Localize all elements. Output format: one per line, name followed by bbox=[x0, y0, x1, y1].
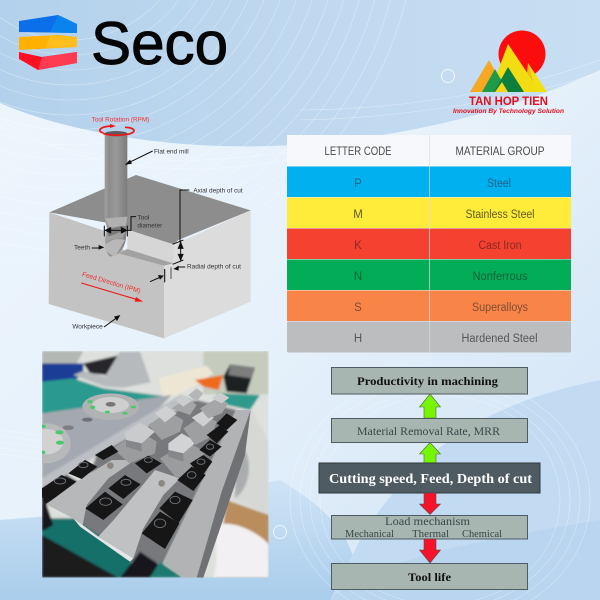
row M: stainless steel bbox=[287, 198, 571, 228]
steel bolts bbox=[107, 462, 165, 487]
row P: steel: P bbox=[354, 178, 362, 190]
aluminium rails bbox=[46, 410, 251, 578]
box: cutting parameters: Cutting speed, Feed, Depth of cut bbox=[329, 472, 532, 487]
label: workpiece bbox=[72, 315, 120, 330]
label: tool diameter bbox=[104, 214, 162, 236]
row H: hardened steel: Hardened Steel bbox=[462, 333, 538, 345]
box: load mechanism: Chemical bbox=[462, 529, 502, 540]
icon: Seco stacked bands bbox=[19, 15, 77, 70]
box: material removal rate bbox=[332, 418, 528, 442]
workpiece block bbox=[49, 175, 251, 338]
label: axial depth of cut: Axial depth of cut bbox=[193, 187, 243, 194]
row S: superalloys: S bbox=[354, 302, 362, 314]
logo: Seco bbox=[19, 10, 228, 77]
machined parts bbox=[113, 388, 229, 478]
row N: nonferrous: Nonferrous bbox=[472, 271, 528, 283]
row H: hardened steel: H bbox=[354, 333, 362, 345]
flat end mill bbox=[105, 131, 127, 257]
fixture discs bbox=[42, 393, 139, 464]
row M: stainless steel: M bbox=[353, 209, 363, 221]
row S: superalloys: Superalloys bbox=[472, 302, 528, 314]
label: flat end mill bbox=[125, 149, 189, 165]
row S: superalloys bbox=[287, 290, 571, 321]
box: load mechanism: Mechanical bbox=[345, 529, 394, 540]
feed direction arrow: Feed Direction (IPM) bbox=[81, 271, 141, 295]
label: radial depth of cut: Radial depth of cut bbox=[187, 264, 241, 271]
box: load mechanism: Thermal bbox=[412, 529, 449, 540]
box: productivity in machining: Productivity in machining bbox=[357, 374, 498, 388]
company name: TAN HOP TIEN bbox=[469, 96, 548, 108]
box: load mechanism bbox=[332, 514, 528, 540]
box: productivity in machining bbox=[332, 368, 528, 394]
row N: nonferrous: N bbox=[354, 271, 362, 283]
diagram: end milling bbox=[49, 116, 251, 338]
flow chart bbox=[319, 368, 540, 590]
box: material removal rate: Material Removal Rate, MRR bbox=[357, 424, 500, 438]
row P: steel: Steel bbox=[487, 178, 511, 190]
row N: nonferrous bbox=[287, 260, 571, 290]
icon: sun and mountains bbox=[470, 30, 547, 92]
tagline: Innovation By Technology Solution bbox=[453, 108, 564, 115]
label: radial depth of cut bbox=[150, 264, 241, 282]
arrow: red down 1 bbox=[420, 493, 440, 514]
table: ISO material groups bbox=[287, 135, 571, 352]
label: workpiece: Workpiece bbox=[72, 323, 103, 330]
wordmark: Seco bbox=[91, 10, 228, 77]
box: cutting parameters bbox=[319, 463, 540, 493]
label: teeth bbox=[74, 245, 104, 252]
arrow: red down 2 bbox=[420, 539, 440, 563]
label: axial depth of cut bbox=[173, 187, 243, 264]
arrow: green up 1 bbox=[420, 394, 440, 418]
box: tool life bbox=[332, 564, 528, 590]
label: tool diameter: diameter bbox=[137, 222, 162, 229]
logo: Tan Hop Tien bbox=[453, 30, 564, 115]
arrow: green up 2 bbox=[420, 442, 440, 463]
label: teeth: Teeth bbox=[74, 245, 90, 252]
rotation arrow bbox=[100, 124, 134, 135]
row K: cast iron: K bbox=[354, 240, 362, 252]
label: flat end mill: Flat end mill bbox=[154, 149, 189, 156]
row M: stainless steel: Stainless Steel bbox=[466, 209, 534, 221]
label: tool diameter: Tool bbox=[137, 214, 149, 221]
row P: steel bbox=[287, 166, 571, 197]
row K: cast iron bbox=[287, 228, 571, 259]
row H: hardened steel bbox=[287, 322, 571, 352]
table header: MATERIAL GROUP bbox=[456, 146, 545, 158]
photo: machining fixture with workpieces bbox=[23, 351, 269, 578]
black clamps bbox=[42, 413, 237, 549]
box: load mechanism: Load mechanism bbox=[385, 514, 471, 528]
table header bbox=[287, 135, 571, 166]
box: tool life: Tool life bbox=[408, 570, 452, 584]
row K: cast iron: Cast Iron bbox=[478, 240, 522, 252]
label: tool rotation: Tool Rotation (RPM) bbox=[92, 116, 149, 123]
table header: LETTER CODE bbox=[324, 146, 392, 158]
